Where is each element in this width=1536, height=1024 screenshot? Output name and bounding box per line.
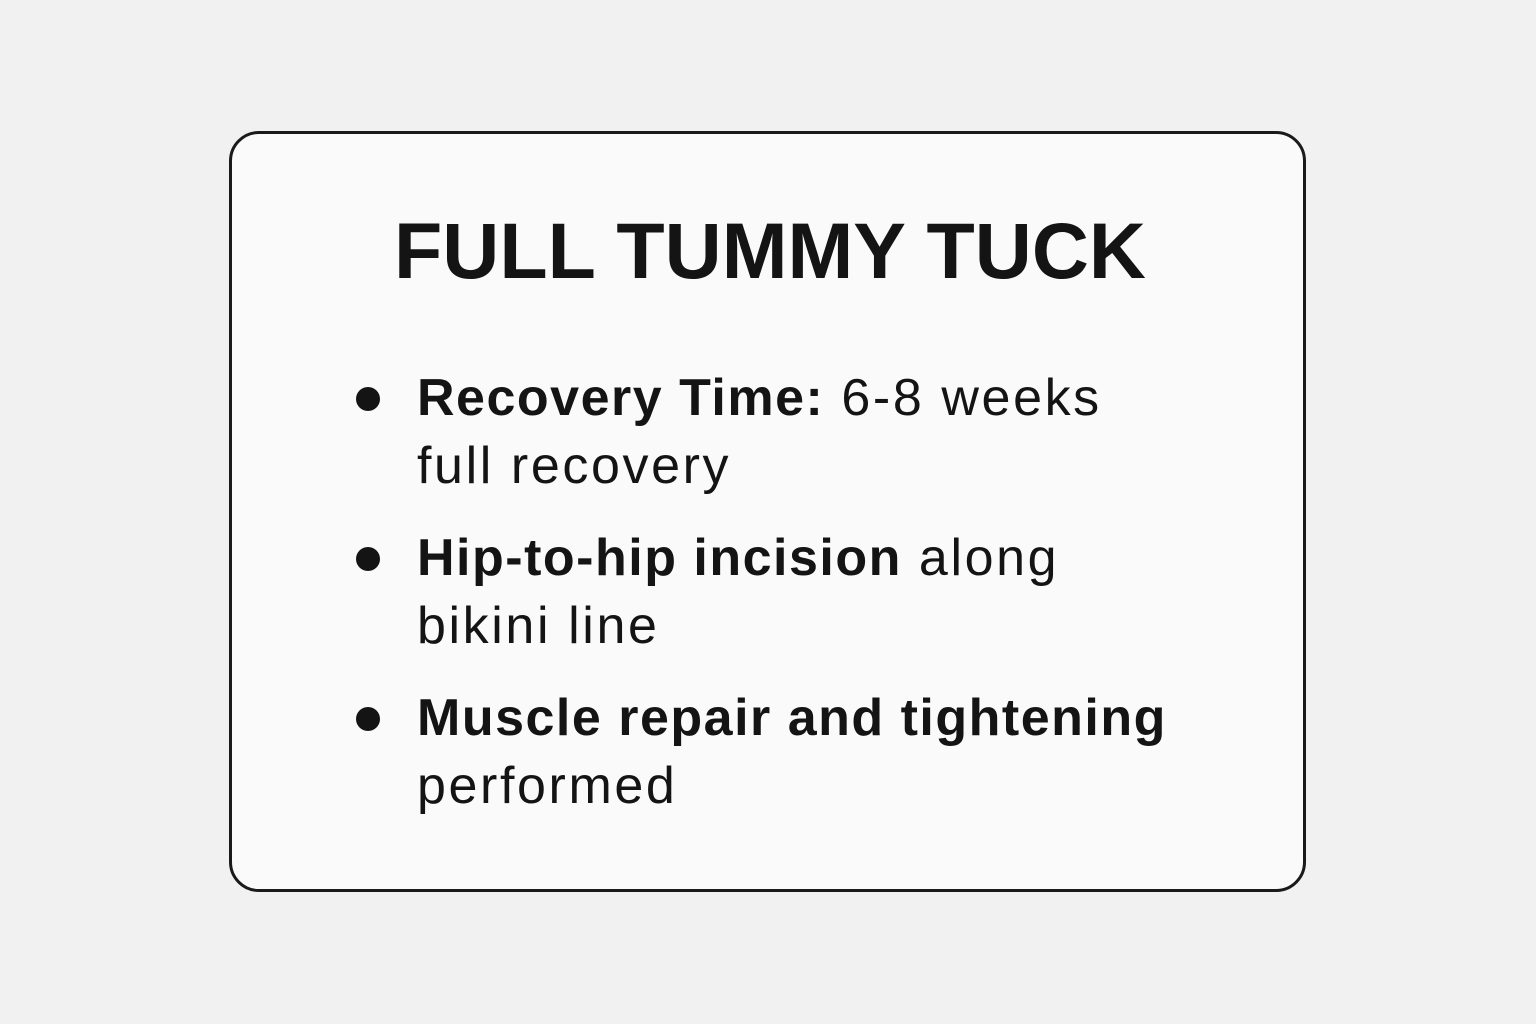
bullet: incision: bikini line <box>417 597 660 655</box>
title: FULL TUMMY TUCK <box>394 206 1146 295</box>
bullet: muscle repair: performed <box>417 757 677 815</box>
bullet: recovery time: Recovery Time: 6-8 weeks <box>417 369 1102 427</box>
bullet: muscle repair <box>356 689 1167 815</box>
bullet: recovery time: full recovery <box>417 437 731 495</box>
bullet: recovery time <box>356 369 1102 495</box>
bullet: incision: Hip-to-hip incision along <box>417 529 1059 587</box>
card panel <box>229 131 1306 892</box>
bullet: incision <box>356 529 1059 655</box>
bullet: muscle repair: Muscle repair and tightening <box>417 689 1167 747</box>
